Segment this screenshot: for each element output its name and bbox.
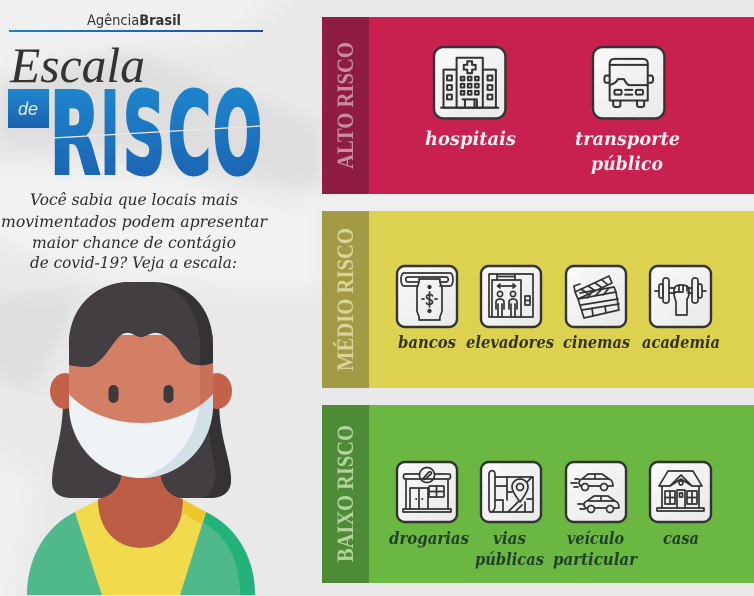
agency logo: AgênciaBrasil bbox=[87, 13, 181, 29]
intro text: movimentados podem apresentar bbox=[1, 212, 268, 231]
intro text: Você sabia que locais mais bbox=[30, 190, 238, 209]
title: RISCO: R bbox=[50, 70, 100, 200]
label: bancos: bancos bbox=[398, 333, 456, 353]
side label: alto risco: ALTO RISCO bbox=[333, 42, 358, 169]
icon: private vehicles bbox=[566, 462, 626, 522]
jacket left bbox=[27, 512, 102, 595]
badge: de bbox=[8, 89, 49, 128]
icon: banks bbox=[397, 266, 457, 327]
mask bbox=[69, 394, 213, 478]
upper hair bbox=[69, 282, 213, 367]
label: transporte público: transporte bbox=[575, 128, 680, 150]
icon: bus bbox=[593, 47, 664, 118]
icon: pharmacies bbox=[397, 462, 457, 522]
icon: hospital bbox=[434, 47, 505, 118]
label: transporte público: público bbox=[591, 153, 663, 175]
face bbox=[69, 335, 213, 478]
icon: cinemas bbox=[566, 266, 626, 327]
icon: public roads bbox=[481, 462, 541, 522]
label: veiculo particular: veículo bbox=[567, 529, 624, 549]
title: Escala: Escala bbox=[9, 37, 145, 93]
title: RISCO: O bbox=[213, 70, 262, 200]
intro text bbox=[1, 190, 268, 272]
title: RISCO: I bbox=[101, 70, 119, 200]
title: RISCO: S bbox=[123, 70, 165, 200]
label: cinemas: cinemas bbox=[563, 333, 630, 353]
label: academia: academia bbox=[642, 333, 720, 353]
panel: baixo risco bbox=[322, 405, 754, 583]
label: veiculo particular bbox=[553, 529, 638, 570]
label: hospitais: hospitais bbox=[425, 128, 516, 150]
icon: house bbox=[650, 462, 711, 522]
panel: alto risco bbox=[322, 17, 754, 194]
label: drogarias: drogarias bbox=[389, 529, 469, 549]
label: vias publicas bbox=[475, 529, 544, 570]
label: veiculo particular: particular bbox=[553, 550, 638, 570]
lower hair bbox=[52, 405, 231, 498]
icon: gym bbox=[650, 266, 711, 327]
side label: medio risco: MÉDIO RISCO bbox=[333, 228, 358, 371]
panel: medio risco bbox=[322, 211, 754, 388]
intro text: maior chance de contágio bbox=[32, 233, 236, 252]
shirt bbox=[75, 500, 206, 595]
label: transporte público bbox=[575, 128, 680, 175]
intro text: de covid-19? Veja a escala: bbox=[30, 253, 237, 272]
illustration: woman with mask bbox=[27, 282, 255, 595]
label: casa: casa bbox=[663, 529, 699, 549]
eyes bbox=[108, 385, 118, 403]
ears bbox=[50, 373, 80, 409]
title: RISCO bbox=[50, 70, 262, 200]
label: vias publicas: públicas bbox=[475, 550, 544, 570]
jacket right bbox=[180, 512, 255, 595]
title: RISCO: C bbox=[168, 70, 211, 200]
neck bbox=[98, 470, 183, 548]
badge: de: de bbox=[18, 99, 38, 119]
icon: elevators bbox=[481, 266, 541, 327]
label: elevadores: elevadores bbox=[466, 333, 554, 353]
label: vias publicas: vias bbox=[493, 529, 526, 549]
side label: baixo risco: BAIXO RISCO bbox=[333, 425, 358, 562]
